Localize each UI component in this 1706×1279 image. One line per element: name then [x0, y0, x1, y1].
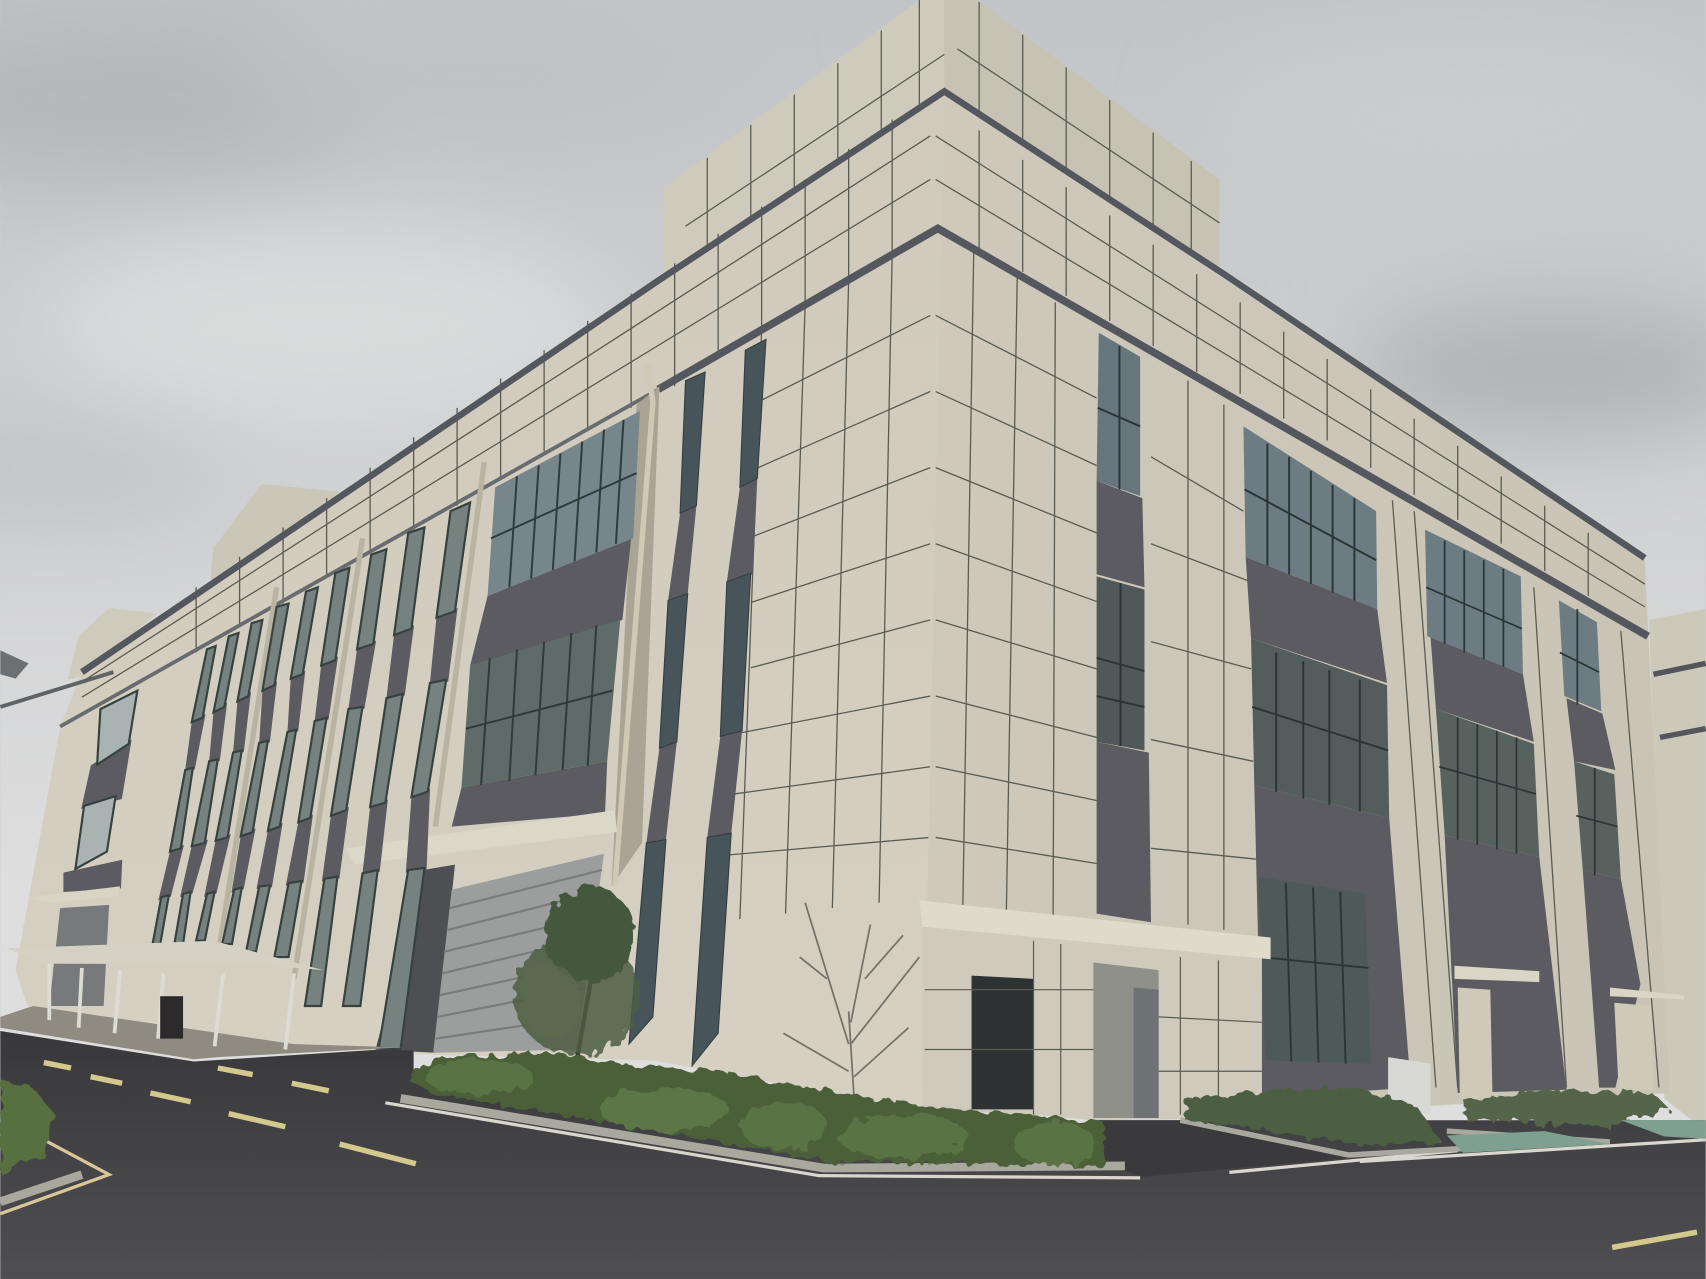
taupe pilaster with downpipe [218, 364, 659, 979]
right hedges [1184, 1088, 1670, 1144]
right facade window group B [1425, 530, 1566, 1093]
lane markings and kerbs [0, 1063, 1706, 1247]
road surface [0, 1031, 1706, 1279]
entrance canopy and ground floor [919, 901, 1271, 1120]
street lamp [0, 650, 113, 707]
rooftop penthouse [664, 0, 1220, 274]
tree left of entrance [514, 887, 640, 1060]
large left windows and spandrels [452, 411, 640, 827]
main hedge [407, 1053, 1104, 1166]
far left penthouse volumes [68, 484, 340, 680]
narrow window columns on left wing [28, 502, 470, 1050]
carport canopy [7, 941, 323, 1050]
right facade corner window column [1097, 333, 1151, 922]
right facade window group A [1243, 426, 1411, 1098]
right facade window group C [1559, 600, 1640, 1088]
canopy and roller door [346, 810, 617, 1053]
neighbouring building at right edge [1649, 609, 1706, 1131]
green paved strip [1447, 1120, 1706, 1153]
left hedge [0, 1079, 55, 1175]
grid lines: right facade [936, 131, 1659, 1088]
right facade [923, 92, 1670, 1118]
bare tree [783, 903, 919, 1098]
left facade windows near corner [629, 339, 766, 1066]
small doors and canopies on right [1388, 966, 1684, 1115]
dark roof bands [60, 91, 1648, 727]
left facade [16, 92, 944, 1109]
paved carport area [0, 1006, 403, 1059]
grid lines: left facade [82, 120, 930, 919]
